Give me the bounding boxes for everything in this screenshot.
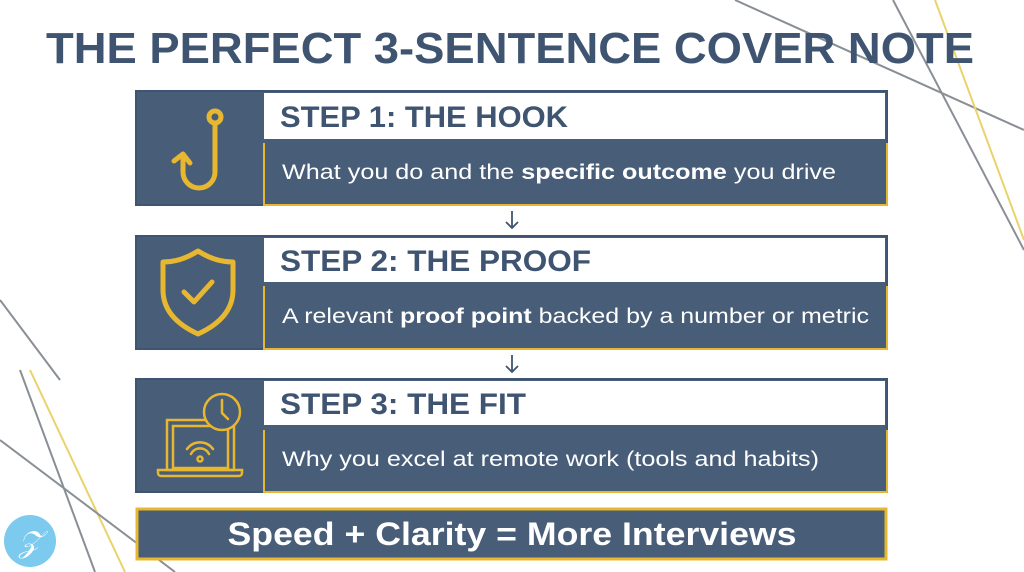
- arrow 1: [506, 211, 518, 228]
- icon: logo: [4, 515, 56, 567]
- heading: step 3: STEP 3: THE FIT: [280, 388, 526, 421]
- text: step 3: Why you excel at remote work (tools and habits): [282, 448, 819, 471]
- panel: step 2: [136, 236, 887, 349]
- panel: step 1: [136, 91, 887, 205]
- icon: laptop clock: [158, 394, 242, 476]
- title: THE PERFECT 3-SENTENCE COVER NOTE: [46, 24, 974, 73]
- heading: step 2: STEP 2: THE PROOF: [280, 245, 591, 278]
- icon: shield: [163, 251, 233, 334]
- icon: hook: [174, 111, 221, 188]
- heading: step 1: STEP 1: THE HOOK: [280, 101, 568, 134]
- text: step 2: A relevant proof point backed by a number or metric: [282, 305, 869, 328]
- panel: bottom summary: [137, 509, 886, 559]
- panel: step 3: [136, 379, 887, 492]
- text: step 1: What you do and the specific outcome you drive: [282, 161, 836, 184]
- panel: bottom summary: Speed + Clarity = More Interviews: [228, 516, 796, 552]
- icon: logo: 𝒵: [18, 526, 49, 559]
- arrow 2: [506, 355, 518, 372]
